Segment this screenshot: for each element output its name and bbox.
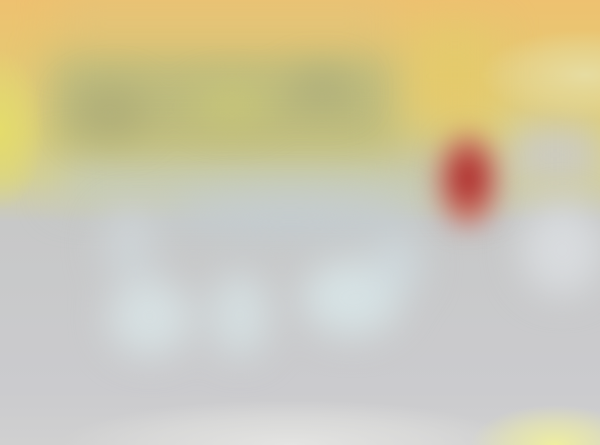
red blob — [438, 134, 498, 226]
olive and yellow header band — [50, 5, 600, 202]
left yellow edge — [0, 50, 45, 210]
pale blue-grey shapes — [102, 193, 600, 357]
top right pale yellow patch — [480, 30, 600, 120]
olive band variation — [74, 72, 354, 138]
bottom right yellow corner — [470, 405, 600, 445]
bottom light band — [60, 400, 520, 445]
